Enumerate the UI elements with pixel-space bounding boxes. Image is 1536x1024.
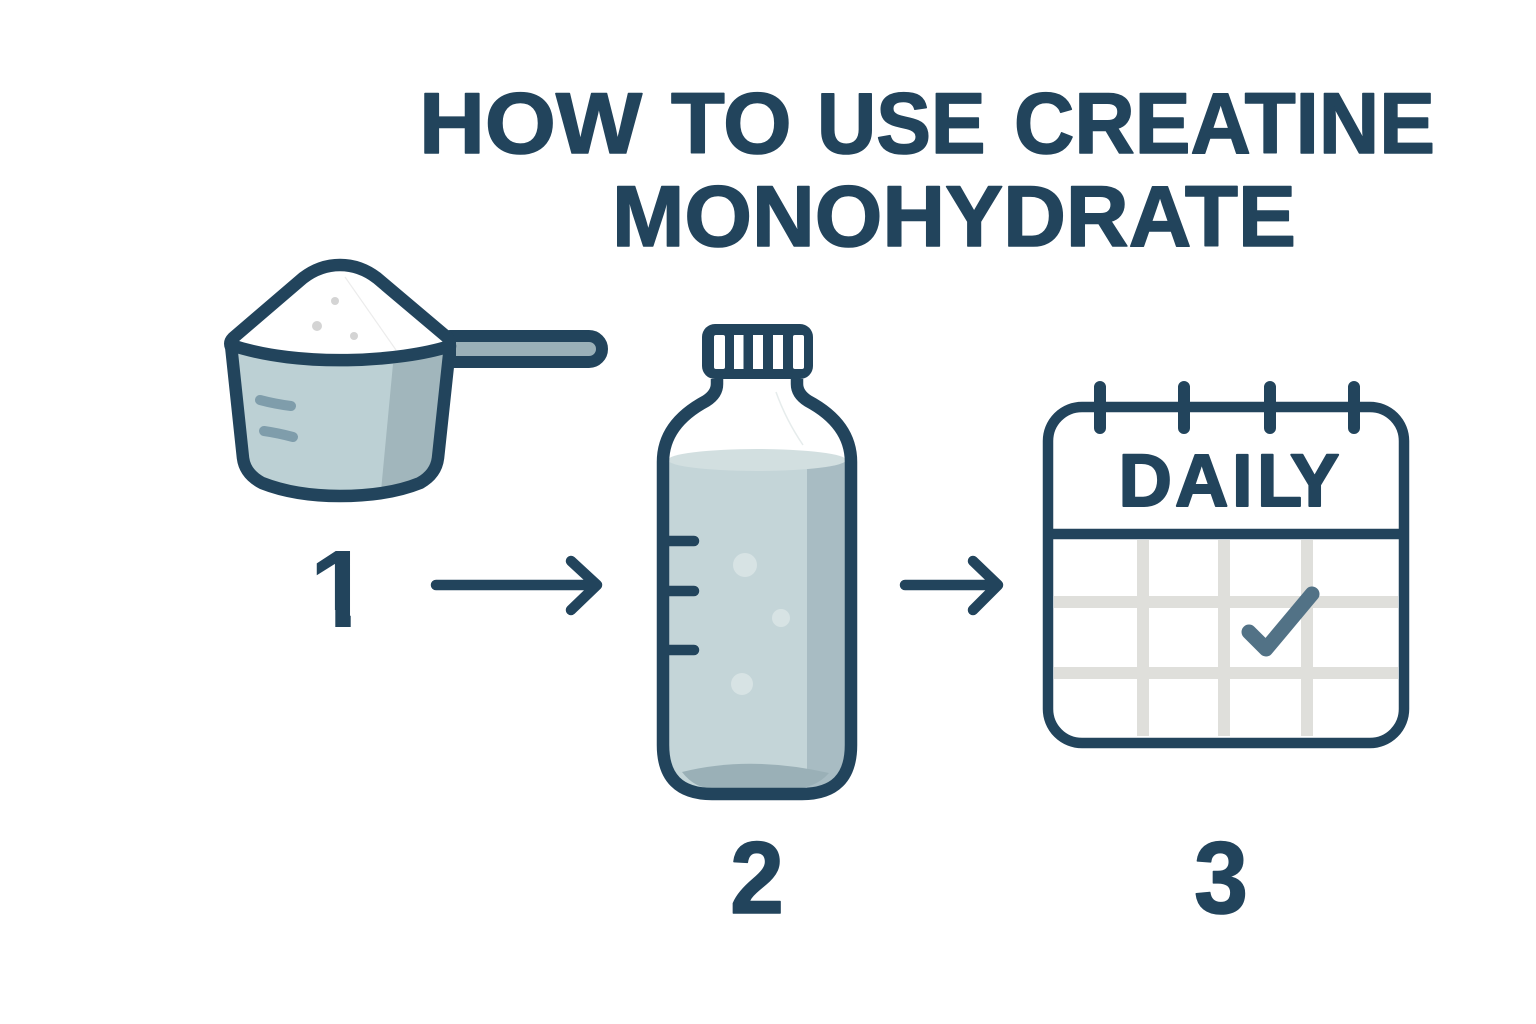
bubbles xyxy=(731,553,790,695)
scoop outline xyxy=(230,265,450,496)
title xyxy=(419,76,1435,265)
water xyxy=(668,453,846,790)
title: CREATINE xyxy=(1014,76,1435,172)
step number 1: 1 xyxy=(309,528,370,651)
bottle base shadow xyxy=(682,764,829,789)
bottle highlight xyxy=(776,392,803,445)
bottle outline xyxy=(663,379,851,794)
bottle cap xyxy=(702,324,813,379)
step number 2: 2 xyxy=(730,821,784,935)
calendar frame xyxy=(1048,407,1404,743)
title: TO xyxy=(671,76,792,172)
powder mound xyxy=(231,265,448,359)
water side shade xyxy=(807,460,846,789)
icon: measuring scoop with powder xyxy=(230,265,602,496)
measure mark lower xyxy=(264,431,293,437)
title: MONOHYDRATE xyxy=(612,169,1296,265)
check mark xyxy=(1249,594,1312,649)
powder highlight xyxy=(345,277,396,350)
arrow: step 2 to step 3 xyxy=(905,561,998,610)
calendar grid xyxy=(1054,540,1398,736)
step number 3: 3 xyxy=(1194,821,1248,935)
icon: water bottle xyxy=(663,324,851,794)
scoop handle xyxy=(450,336,602,362)
title: HOW xyxy=(419,76,643,172)
cap slots xyxy=(714,335,804,369)
arrow: step 1 to step 2 xyxy=(436,561,597,610)
binding rings xyxy=(1100,387,1354,428)
powder grains xyxy=(312,297,358,340)
measure mark upper xyxy=(260,400,291,406)
header divider xyxy=(1048,529,1404,539)
title: USE xyxy=(817,76,986,172)
measurement ticks xyxy=(665,541,694,650)
water surface xyxy=(668,449,846,471)
scoop body shade xyxy=(381,352,447,491)
scoop body xyxy=(231,348,450,496)
icon: daily calendar xyxy=(1048,387,1404,743)
calendar label: DAILY xyxy=(1118,439,1339,522)
